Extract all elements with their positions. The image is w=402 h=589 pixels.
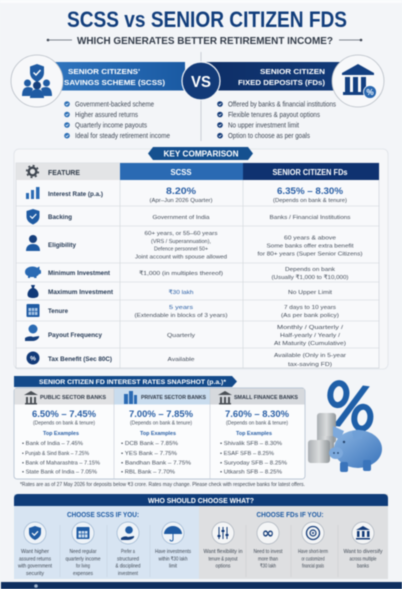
banner: SCSS: SENIOR CITIZENS' bbox=[68, 67, 140, 76]
item: disciplined investment: & disciplined bbox=[116, 564, 140, 570]
row: tenure bbox=[26, 304, 339, 319]
item: within limit: Have investments bbox=[155, 549, 191, 555]
column: choose FDs bbox=[204, 510, 383, 577]
column: private sector banks: • RBL Bank – 7.70% bbox=[121, 470, 175, 476]
table header: SCSS: SCSS bbox=[170, 168, 192, 177]
item: invest more: more than bbox=[258, 556, 278, 562]
row: tenure: 7 days to 10 years bbox=[284, 305, 336, 311]
banner: FDs: SENIOR CITIZEN bbox=[260, 67, 325, 76]
row: minimum investment bbox=[25, 266, 349, 281]
row: tax benefit: % bbox=[30, 356, 36, 362]
table header: feature: FEATURE bbox=[48, 168, 80, 177]
row: minimum investment: Minimum Investment bbox=[48, 270, 111, 277]
heading: rates snapshot bbox=[14, 376, 237, 387]
item: within limit bbox=[155, 522, 191, 570]
illustration: piggy bank with coins and percent bbox=[308, 381, 382, 472]
item: invest more: Need to invest bbox=[254, 549, 283, 555]
list: SCSS features: Ideal for steady retirement income bbox=[75, 133, 170, 140]
item: disciplined investment: structured bbox=[117, 556, 139, 562]
item: within limit: limit bbox=[169, 564, 177, 570]
list: SCSS features: Higher assured returns bbox=[75, 112, 138, 119]
row: eligibility: for 80+ years (Super Senior Citizens) bbox=[258, 252, 363, 258]
column: small finance banks: • Shivalik SFB – 8.30% bbox=[220, 441, 282, 447]
item: disciplined investment bbox=[116, 522, 140, 577]
footer band bbox=[1, 582, 402, 589]
list: FD features: Flexible tenures & payout options bbox=[228, 112, 320, 119]
row: backing: Government of India bbox=[152, 215, 210, 221]
banner: FDs bbox=[201, 62, 343, 90]
column: small finance banks: 7.60% – 8.30% bbox=[225, 409, 290, 420]
row: tax benefit: Available bbox=[168, 357, 194, 363]
item: short-term goals: financial goals bbox=[302, 564, 324, 570]
column: small finance banks: • Suryoday SFB – 8.25% bbox=[220, 460, 287, 466]
heading bar: WHO SHOULD CHOOSE WHAT? bbox=[148, 498, 254, 505]
item: diversify: Want to diversify bbox=[344, 549, 383, 555]
row: tax benefit: tax-saving FD) bbox=[288, 362, 332, 368]
row: tenure: (As per bank policy) bbox=[281, 313, 339, 319]
row: minimum investment: Depends on bank bbox=[285, 267, 335, 273]
column: public sector banks: 6.50% – 7.45% bbox=[32, 409, 97, 420]
item: quarterly income: quarterly income bbox=[66, 556, 100, 562]
column: public sector banks: • Bank of Maharashtra – 7.15% bbox=[22, 460, 100, 466]
table header: feature bbox=[16, 163, 120, 180]
VS badge bbox=[182, 62, 220, 100]
item: diversify: banks bbox=[357, 564, 369, 570]
row: tenure: (Extendable in blocks of 3 years) bbox=[134, 313, 228, 319]
row: backing: Backing bbox=[48, 214, 72, 221]
heading bar bbox=[14, 494, 388, 506]
row: tenure: Tenure bbox=[48, 308, 68, 315]
row: maximum investment: No Upper Limit bbox=[288, 290, 332, 296]
item: within limit: within ₹30 lakh bbox=[158, 556, 188, 562]
column: private sector banks: (Depends on bank & tenure) bbox=[130, 420, 192, 426]
column: choose SCSS: CHOOSE SCSS IF YOU: bbox=[67, 510, 139, 519]
item: flexibility: options bbox=[216, 564, 231, 570]
column: private sector banks: Top Examples bbox=[140, 431, 176, 437]
item: assured returns: with government bbox=[17, 564, 52, 570]
item: short-term goals: or customized bbox=[302, 556, 324, 562]
column: public sector banks: • Bank of India – 7.45% bbox=[22, 441, 83, 447]
row: backing: Banks / Financial Institutions bbox=[270, 215, 351, 221]
badge: key comparison: KEY COMPARISON bbox=[164, 150, 239, 158]
table backdrop bbox=[16, 163, 379, 368]
row: eligibility: Eligibility bbox=[48, 242, 76, 249]
row: payout frequency: Half-yearly / Yearly / bbox=[280, 333, 340, 339]
subtitle: WHICH GENERATES BETTER RETIREMENT INCOME? bbox=[77, 35, 333, 47]
footnote: *Rates are as of 27 May 2026 for deposits below ₹3 crore. Rates may change. Please check with respective banks for latest offers. bbox=[20, 482, 305, 488]
banner: SCSS: SAVINGS SCHEME (SCSS) bbox=[64, 78, 165, 87]
panel: key comparison bbox=[14, 149, 388, 369]
row: eligibility: 60 years & above bbox=[284, 236, 336, 242]
icon: shield and people bbox=[11, 55, 63, 107]
item: short-term goals bbox=[298, 522, 328, 570]
table header: FDs bbox=[243, 163, 379, 180]
percent sign bbox=[326, 381, 375, 431]
column: choose FDs: CHOOSE FDs IF YOU: bbox=[256, 510, 324, 519]
row: tax benefit bbox=[26, 352, 346, 368]
row: eligibility: Defence personnel 50+ bbox=[154, 246, 209, 252]
item: assured returns: assured returns bbox=[19, 556, 51, 562]
row: maximum investment: Maximum Investment bbox=[48, 289, 114, 296]
item: short-term goals: Have short-term bbox=[298, 549, 328, 555]
heading: rates snapshot: SENIOR CITIZEN FD INTEREST RATES SNAPSHOT (p.a.)* bbox=[39, 379, 226, 386]
column: private sector banks: • Bandhan Bank – 7.75% bbox=[121, 460, 191, 466]
row: tax benefit: Available (Only in 5-year bbox=[274, 353, 346, 359]
column: public sector banks: (Depends on bank & tenure) bbox=[33, 420, 95, 426]
column: private sector banks bbox=[114, 388, 210, 476]
column: small finance banks bbox=[210, 388, 304, 476]
item: assured returns: Want higher bbox=[21, 549, 49, 555]
column: small finance banks: • Utkarsh SFB – 8.25% bbox=[220, 470, 282, 476]
banner: FDs: FIXED DEPOSITS (FDs) bbox=[238, 78, 325, 87]
VS badge: VS bbox=[191, 74, 211, 91]
item: invest more bbox=[254, 522, 283, 570]
column: private sector banks: • YES Bank – 7.75% bbox=[121, 451, 177, 457]
row: payout frequency: Monthly / Quarterly / bbox=[277, 325, 343, 331]
row: eligibility bbox=[26, 231, 363, 260]
list: SCSS features: Quarterly income payouts bbox=[75, 122, 147, 130]
column: small finance banks: SMALL FINANCE BANKS bbox=[234, 395, 298, 401]
list: FD features: Offered by banks & financial institutions bbox=[228, 102, 336, 108]
item: disciplined investment: Prefer a bbox=[121, 549, 136, 555]
table header: SCSS bbox=[120, 163, 243, 180]
item: diversify: across multiple bbox=[350, 556, 376, 562]
list: FD features: No upper investment limit bbox=[228, 122, 299, 130]
row: interest rate bbox=[26, 186, 347, 204]
column: private sector banks: • DCB Bank – 7.85% bbox=[121, 441, 178, 447]
row: eligibility: (VRS / Superannuation), bbox=[151, 239, 211, 245]
table header: FDs: SENIOR CITIZEN FDs bbox=[272, 168, 348, 177]
column: small finance banks: • ESAF SFB – 8.25% bbox=[220, 451, 274, 457]
column: public sector banks: • Punjab & Sind Bank – 7.25% bbox=[22, 451, 89, 457]
row: tenure: 5 years bbox=[169, 305, 193, 311]
row: maximum investment: ₹30 lakh bbox=[168, 289, 194, 296]
column: choose SCSS bbox=[17, 510, 191, 577]
list: FD features bbox=[217, 101, 336, 140]
badge: key comparison bbox=[148, 147, 253, 160]
item: quarterly income bbox=[66, 522, 100, 577]
column: small finance banks: Top Examples bbox=[236, 431, 272, 437]
icon: bank with percent bbox=[332, 55, 384, 107]
item: invest more: ∞ bbox=[262, 524, 274, 542]
icon: bank with percent: % bbox=[366, 88, 374, 97]
item: invest more: ₹30 lakh bbox=[260, 562, 276, 570]
row: payout frequency bbox=[25, 324, 346, 347]
list: SCSS features bbox=[64, 101, 170, 140]
column: public sector banks: PUBLIC SECTOR BANKS bbox=[40, 395, 106, 401]
item: diversify bbox=[344, 522, 383, 570]
column: small finance banks: (Depends on bank & tenure) bbox=[226, 420, 288, 426]
row: payout frequency: At Maturity (Cumulative) bbox=[274, 341, 346, 347]
column: public sector banks: Top Examples bbox=[43, 431, 79, 437]
row: minimum investment: ₹1,000 (in multiples thereof) bbox=[139, 270, 223, 277]
item: flexibility: tenure & payout bbox=[208, 556, 238, 562]
banner: SCSS bbox=[55, 62, 185, 90]
row: payout frequency: Payout Frequency bbox=[48, 332, 102, 339]
row: minimum investment: (Usually ₹1,000 to ₹10,000) bbox=[272, 274, 349, 281]
row: eligibility: Joint account with spouse allowed bbox=[135, 254, 227, 260]
item: disciplined investment: investment bbox=[118, 571, 138, 577]
title: SCSS vs SENIOR CITIZEN FDS bbox=[67, 7, 347, 32]
panel: who should choose bbox=[14, 494, 388, 579]
item: quarterly income: for living bbox=[76, 564, 90, 570]
row: interest rate: (Apr–Jun 2026 Quarter) bbox=[150, 198, 213, 204]
column: public sector banks bbox=[14, 388, 114, 476]
row: eligibility: 60+ years, or 55–60 years bbox=[144, 231, 218, 237]
row: interest rate: 8.20% bbox=[166, 186, 197, 197]
list: SCSS features: Government-backed scheme bbox=[75, 102, 154, 108]
row: tax benefit: Tax Benefit (Sec 80C) bbox=[48, 356, 112, 363]
item: assured returns: security bbox=[26, 571, 44, 577]
row: backing bbox=[26, 209, 351, 224]
row: eligibility: Some banks offer extra benefit bbox=[266, 244, 354, 250]
item: flexibility: Want flexibility in bbox=[204, 549, 242, 555]
list: FD features: Option to choose as per goals bbox=[228, 133, 310, 140]
item: quarterly income: Need regular bbox=[70, 549, 97, 555]
panel: rates snapshot bbox=[14, 388, 305, 479]
item: quarterly income: expenses bbox=[73, 571, 93, 577]
row: payout frequency: Quarterly bbox=[167, 333, 195, 339]
column: private sector banks: PRIVATE SECTOR BANKS bbox=[141, 395, 206, 401]
item: flexibility bbox=[204, 522, 242, 570]
column: public sector banks: • State Bank of India – 7.05% bbox=[22, 470, 97, 476]
column: private sector banks: 7.00% – 7.85% bbox=[129, 409, 194, 420]
row: interest rate: 6.35% – 8.30% bbox=[277, 186, 344, 197]
item: assured returns bbox=[17, 522, 52, 577]
row: interest rate: (Depends on bank & tenure) bbox=[273, 198, 347, 204]
row: maximum investment bbox=[28, 285, 332, 298]
row: interest rate: Interest Rate (p.a.) bbox=[48, 191, 103, 198]
